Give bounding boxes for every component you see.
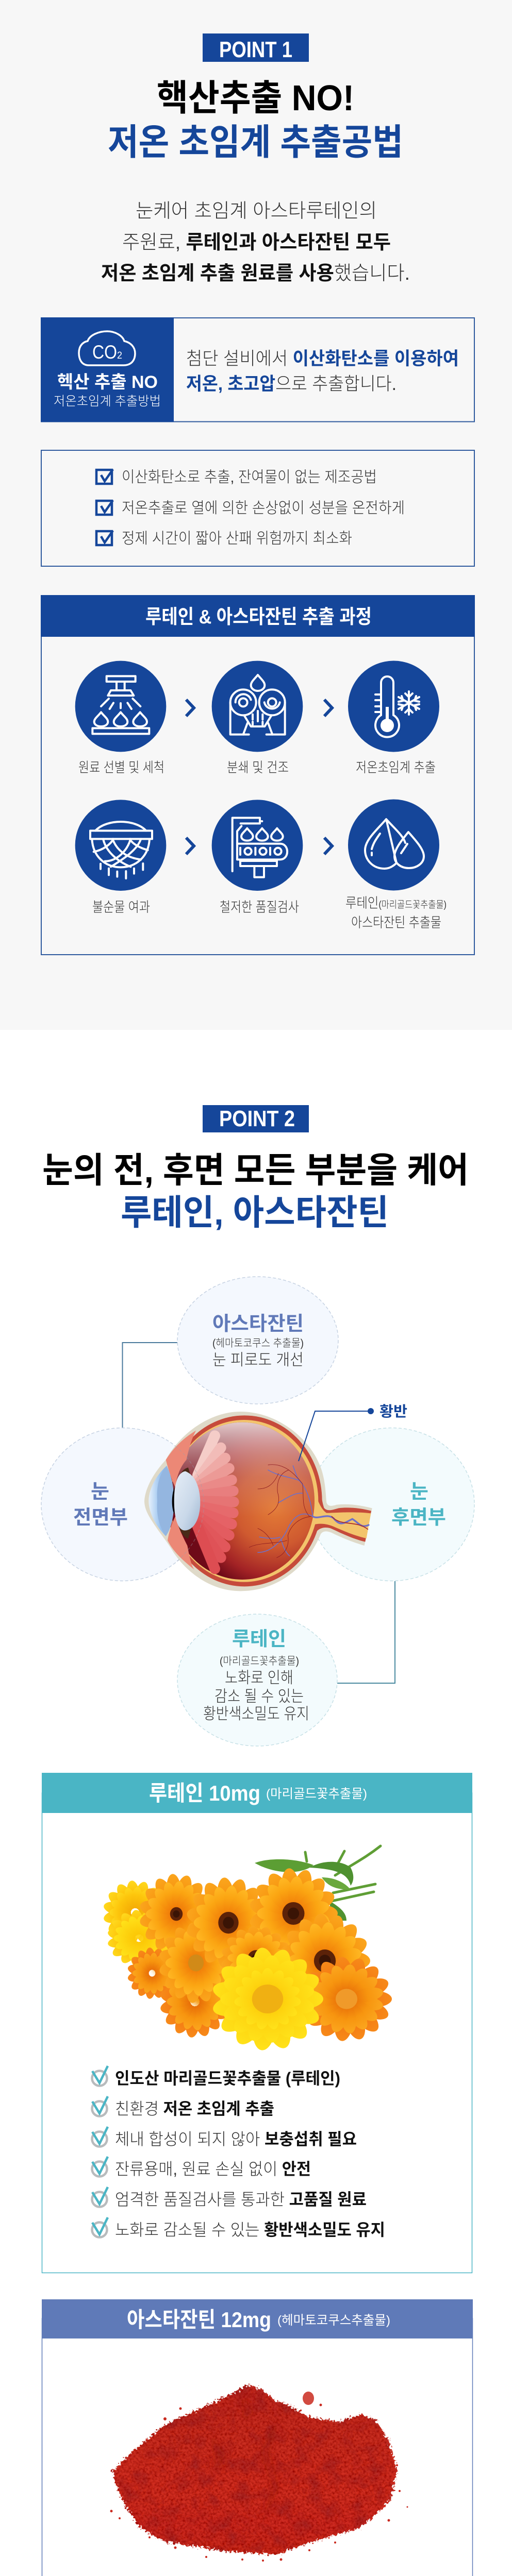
title: 핵산추출 NO: 핵산추출 NO! [157,78,354,118]
label: step 1: 원료 선별 및 세척 [78,760,164,775]
icon: CO2 cloud: 2 [117,350,122,361]
title: 루테인, 아스타잔틴: 루테인, 아스타잔틴 [121,1193,389,1232]
arrow 2 [324,700,332,716]
ciliary folds [197,1436,234,1569]
icon: checkbox 1 [96,469,113,484]
text: 눈 후면부 [391,1481,446,1529]
text: 눈 전면부 [73,1481,128,1529]
item 4: 잔류용매, 원료 손실 없이 안전 [115,2160,311,2178]
connector: astaxanthin to anterior [123,1343,177,1428]
panel: astaxanthin [42,2299,473,2576]
label: step 6: 루테인(마리골드꽃추출물) [345,895,447,911]
callout: 아스타잔틴 [177,1277,338,1404]
text: 눈 후면부: 눈 [410,1481,428,1503]
label: step 2: 분쇄 및 건조 [227,760,289,775]
illustration: red powder pile [110,2384,408,2562]
step 1: raw material washing [75,661,166,752]
label: step 3: 저온초임계 추출 [356,760,436,775]
arrow 4 [324,838,332,854]
label: step 5: 철저한 품질검사 [220,900,299,915]
item 1: 인도산 마리골드꽃추출물 (루테인) [115,2069,340,2088]
step 4: impurity filtering [75,800,166,891]
badge: POINT 2: POINT 2 [219,1106,295,1131]
label: step 6 [345,895,447,930]
callout: 루테인: 루테인 [232,1629,286,1650]
arrow 1 [186,700,194,716]
flower: orange C [248,1868,338,1959]
title: 저온 초임계 추출공법: 저온 초임계 추출공법 [108,122,403,162]
arrow 3 [186,838,194,854]
flower: orange yellow-eyed [158,1922,233,2004]
callout: 눈 후면부 [309,1428,474,1581]
item 2: 친환경 저온 초임계 추출 [115,2099,274,2118]
callout: 루테인: 감소 될 수 있는 [214,1687,304,1705]
item 3: 정제 시간이 짧아 산패 위험까지 최소화 [122,530,352,547]
icon: CO2 cloud [79,331,135,365]
connector: lutein to posterior [337,1581,395,1683]
label: step 4: 불순물 여과 [92,900,150,915]
panel: checklist [41,450,474,566]
flower: orange lower middle [159,1965,230,2038]
title: 눈의 전, 후면 모든 부분을 케어: 눈의 전, 후면 모든 부분을 케어 [42,1151,469,1190]
text: panel description: 첨단 설비에서 이산화탄소를 이용하여 [186,349,459,369]
icon: check 3 [92,2127,108,2146]
callout: 루테인: (마리골드꽃추출물) [220,1655,299,1667]
callout: 아스타잔틴: 아스타잔틴 [212,1313,304,1335]
heading: lutein: 루테인 10mg [149,1781,260,1805]
panel: lutein [42,1773,472,2273]
illustration: eye cross section [144,1412,372,1591]
item 5: 엄격한 품질검사를 통과한 고품질 원료 [115,2190,367,2209]
text: panel description [186,349,459,394]
callout: 아스타잔틴: 눈 피로도 개선 [212,1351,304,1369]
iris and ciliary body [166,1431,196,1487]
text: 눈 후면부: 후면부 [391,1507,446,1529]
step 6: extract product [348,800,439,890]
lens [174,1471,200,1531]
heading: astaxanthin: 아스타잔틴 12mg [127,2308,271,2332]
item 3: 체내 합성이 되지 않아 보충섭취 필요 [115,2130,357,2148]
text block: intro paragraph: 주원료, 루테인과 아스타잔틴 모두 [122,232,391,253]
flower: orange lower left [127,1947,177,1999]
callout: 루테인: 노화로 인해 [225,1669,293,1687]
panel: CO2 free extraction [41,317,474,422]
item 2: 저온추출로 열에 의한 손상없이 성분을 온전하게 [122,500,405,517]
checklist: lutein [92,2066,385,2239]
flower: orange A [139,1873,213,1955]
text: panel description: 저온, 초고압으로 추출합니다. [186,374,397,394]
heading: astaxanthin: (헤마토코쿠스추출물) [277,2313,390,2328]
flower: bright yellow G [210,1946,324,2052]
section background: point 1 [0,0,512,1030]
blood vessels [249,1465,369,1557]
label: 헥산 추출 NO: 헥산 추출 NO [57,372,158,392]
flower: back yellow lower [107,1909,171,1967]
illustration: marigold bouquet [103,1846,392,2052]
cornea [148,1466,174,1536]
callout: 아스타잔틴: (헤마토코쿠스 추출물) [212,1337,304,1349]
callout: 황반: 황반 [379,1403,407,1419]
step 5: quality inspection [212,800,303,891]
badge: POINT 1: POINT 1 [219,37,292,62]
flower: orange D [278,1913,370,2009]
heading: lutein: (마리골드꽃추출물) [266,1787,367,1801]
panel: extraction process [41,595,475,955]
text block: intro paragraph: 저온 초임계 추출 원료를 사용했습니다. [101,263,410,284]
stray powder specks [110,2392,408,2562]
heading: lutein [149,1781,367,1805]
item 6: 노화로 감소될 수 있는 황반색소밀도 유지 [115,2221,385,2239]
icon: check 6 [92,2217,108,2237]
icon: checkbox 2 [96,500,113,515]
icon: check 5 [92,2187,108,2207]
icon: checkbox 3 [96,531,113,545]
text: 눈 전면부: 전면부 [73,1507,128,1529]
step 3: low temperature extraction [348,660,439,752]
heading: astaxanthin [127,2308,390,2332]
callout: 눈 전면부 [41,1428,204,1581]
label: 저온초임계 추출방법: 저온초임계 추출방법 [54,394,161,409]
text: 눈 전면부: 눈 [91,1481,109,1503]
dashed overlay: anterior bubble edge [175,1446,204,1563]
text block: intro paragraph: 눈케어 초임계 아스타루테인의 [136,200,377,222]
flower: deep orange H [300,1956,392,2042]
icon: check 2 [92,2096,108,2116]
heading: process title: 루테인 & 아스타잔틴 추출 과정 [145,606,372,628]
callout: 루테인: 황반색소밀도 유지 [203,1705,309,1723]
item 1: 이산화탄소로 추출, 잔여물이 없는 제조공법 [122,469,377,486]
text block: intro paragraph [101,200,410,284]
flower: orange B [185,1877,271,1969]
flower: back yellow [103,1880,167,1945]
icon: check 1 [92,2066,108,2086]
underlay: petals mass [142,1901,356,2027]
icon: check 4 [92,2157,108,2176]
label: step 6: 아스타잔틴 추출물 [351,915,441,930]
callout: 루테인 [177,1614,337,1746]
step 2: grinding and drying [212,661,303,752]
icon: CO2 cloud: CO [92,342,117,363]
callout: 황반 [299,1403,407,1461]
flower: orange E [221,1925,291,1990]
